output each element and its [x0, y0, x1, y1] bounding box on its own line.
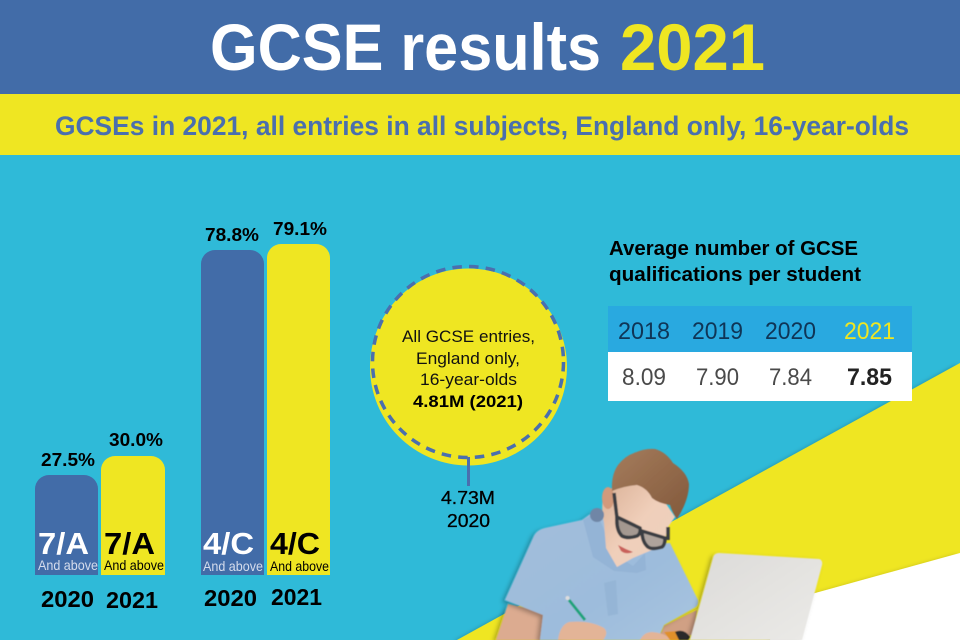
other hand	[640, 632, 672, 640]
table heading: qualifications per student	[609, 263, 861, 286]
shirt placket	[604, 580, 618, 616]
mouth	[618, 545, 633, 553]
circle callout: total entries: All GCSE entries,	[402, 327, 535, 346]
table value row: 8.09	[622, 364, 666, 391]
subtitle band	[0, 94, 960, 155]
bar 7/A 2020: 27.5%	[41, 450, 95, 470]
collar	[583, 512, 646, 573]
hair	[612, 449, 689, 519]
bar 7/A 2020: And above	[38, 557, 98, 573]
2020 total annotation: 2020	[447, 511, 490, 531]
pencil eraser	[566, 596, 570, 600]
bar 7/A 2021: And above	[104, 557, 164, 573]
bar 4/C 2021: And above	[270, 558, 329, 574]
circle callout: total entries: 16-year-olds	[420, 370, 517, 389]
bar 7/A 2021: 30.0%	[109, 430, 163, 450]
bar chart: grade 7/A and above	[35, 430, 165, 613]
bar 7/A 2020: 7/A	[38, 526, 89, 561]
table value row: 7.85	[847, 364, 892, 391]
circle callout: total entries: 4.81M (2021)	[413, 392, 523, 411]
pencil	[569, 600, 585, 620]
bar 4/C 2020	[201, 225, 264, 611]
bar 4/C 2020: 78.8%	[205, 225, 259, 245]
laptop	[690, 553, 822, 640]
bar chart: grade 4/C and above	[201, 219, 330, 611]
watch strap	[664, 631, 680, 640]
subtitle band: GCSEs in 2021, all entries in all subjects, England only, 16-year-olds	[55, 111, 909, 141]
bar 4/C 2020: 4/C	[203, 526, 254, 561]
table value row	[622, 364, 892, 391]
bar 7/A 2020: 2020	[41, 586, 94, 612]
circle callout: total entries: England only,	[416, 349, 520, 368]
bar 4/C 2020: 2020	[204, 585, 257, 611]
bar 7/A 2021	[101, 430, 165, 613]
circle callout: total entries	[370, 266, 567, 466]
header band	[0, 0, 960, 94]
watch	[675, 631, 690, 640]
table header row: 2021	[844, 318, 895, 345]
table header row	[618, 318, 895, 345]
table: average qualifications per student	[608, 306, 912, 401]
bar 4/C 2021	[267, 219, 330, 610]
title: GCSE results	[210, 10, 601, 84]
2020 total annotation	[441, 457, 495, 531]
glasses	[614, 493, 668, 548]
2020 total annotation: 4.73M	[441, 488, 495, 508]
bar 7/A 2020	[35, 450, 98, 612]
white diagonal background shape	[770, 553, 960, 640]
ear	[602, 487, 614, 509]
arms	[496, 604, 697, 640]
yellow diagonal background shape	[457, 363, 960, 640]
table heading	[609, 237, 861, 286]
table heading: Average number of GCSE	[609, 237, 858, 260]
neck and face	[602, 480, 675, 567]
table value row: 7.84	[769, 364, 812, 391]
illustration: student writing at laptop	[496, 449, 822, 640]
bar 7/A 2021: 2021	[106, 587, 158, 613]
writing hand	[558, 622, 606, 640]
title: 2021	[620, 10, 765, 84]
bar 4/C 2020: And above	[203, 558, 263, 574]
collar shadow spot	[590, 508, 604, 522]
bar 7/A 2021: 7/A	[104, 526, 155, 561]
table header row: 2020	[765, 318, 816, 345]
bar 4/C 2021: 4/C	[270, 526, 320, 561]
bar 4/C 2021: 2021	[271, 584, 322, 610]
bar 4/C 2021: 79.1%	[273, 219, 327, 239]
table header row: 2018	[618, 318, 670, 345]
shirt	[505, 510, 698, 640]
table value row: 7.90	[696, 364, 739, 391]
table header row: 2019	[692, 318, 743, 345]
